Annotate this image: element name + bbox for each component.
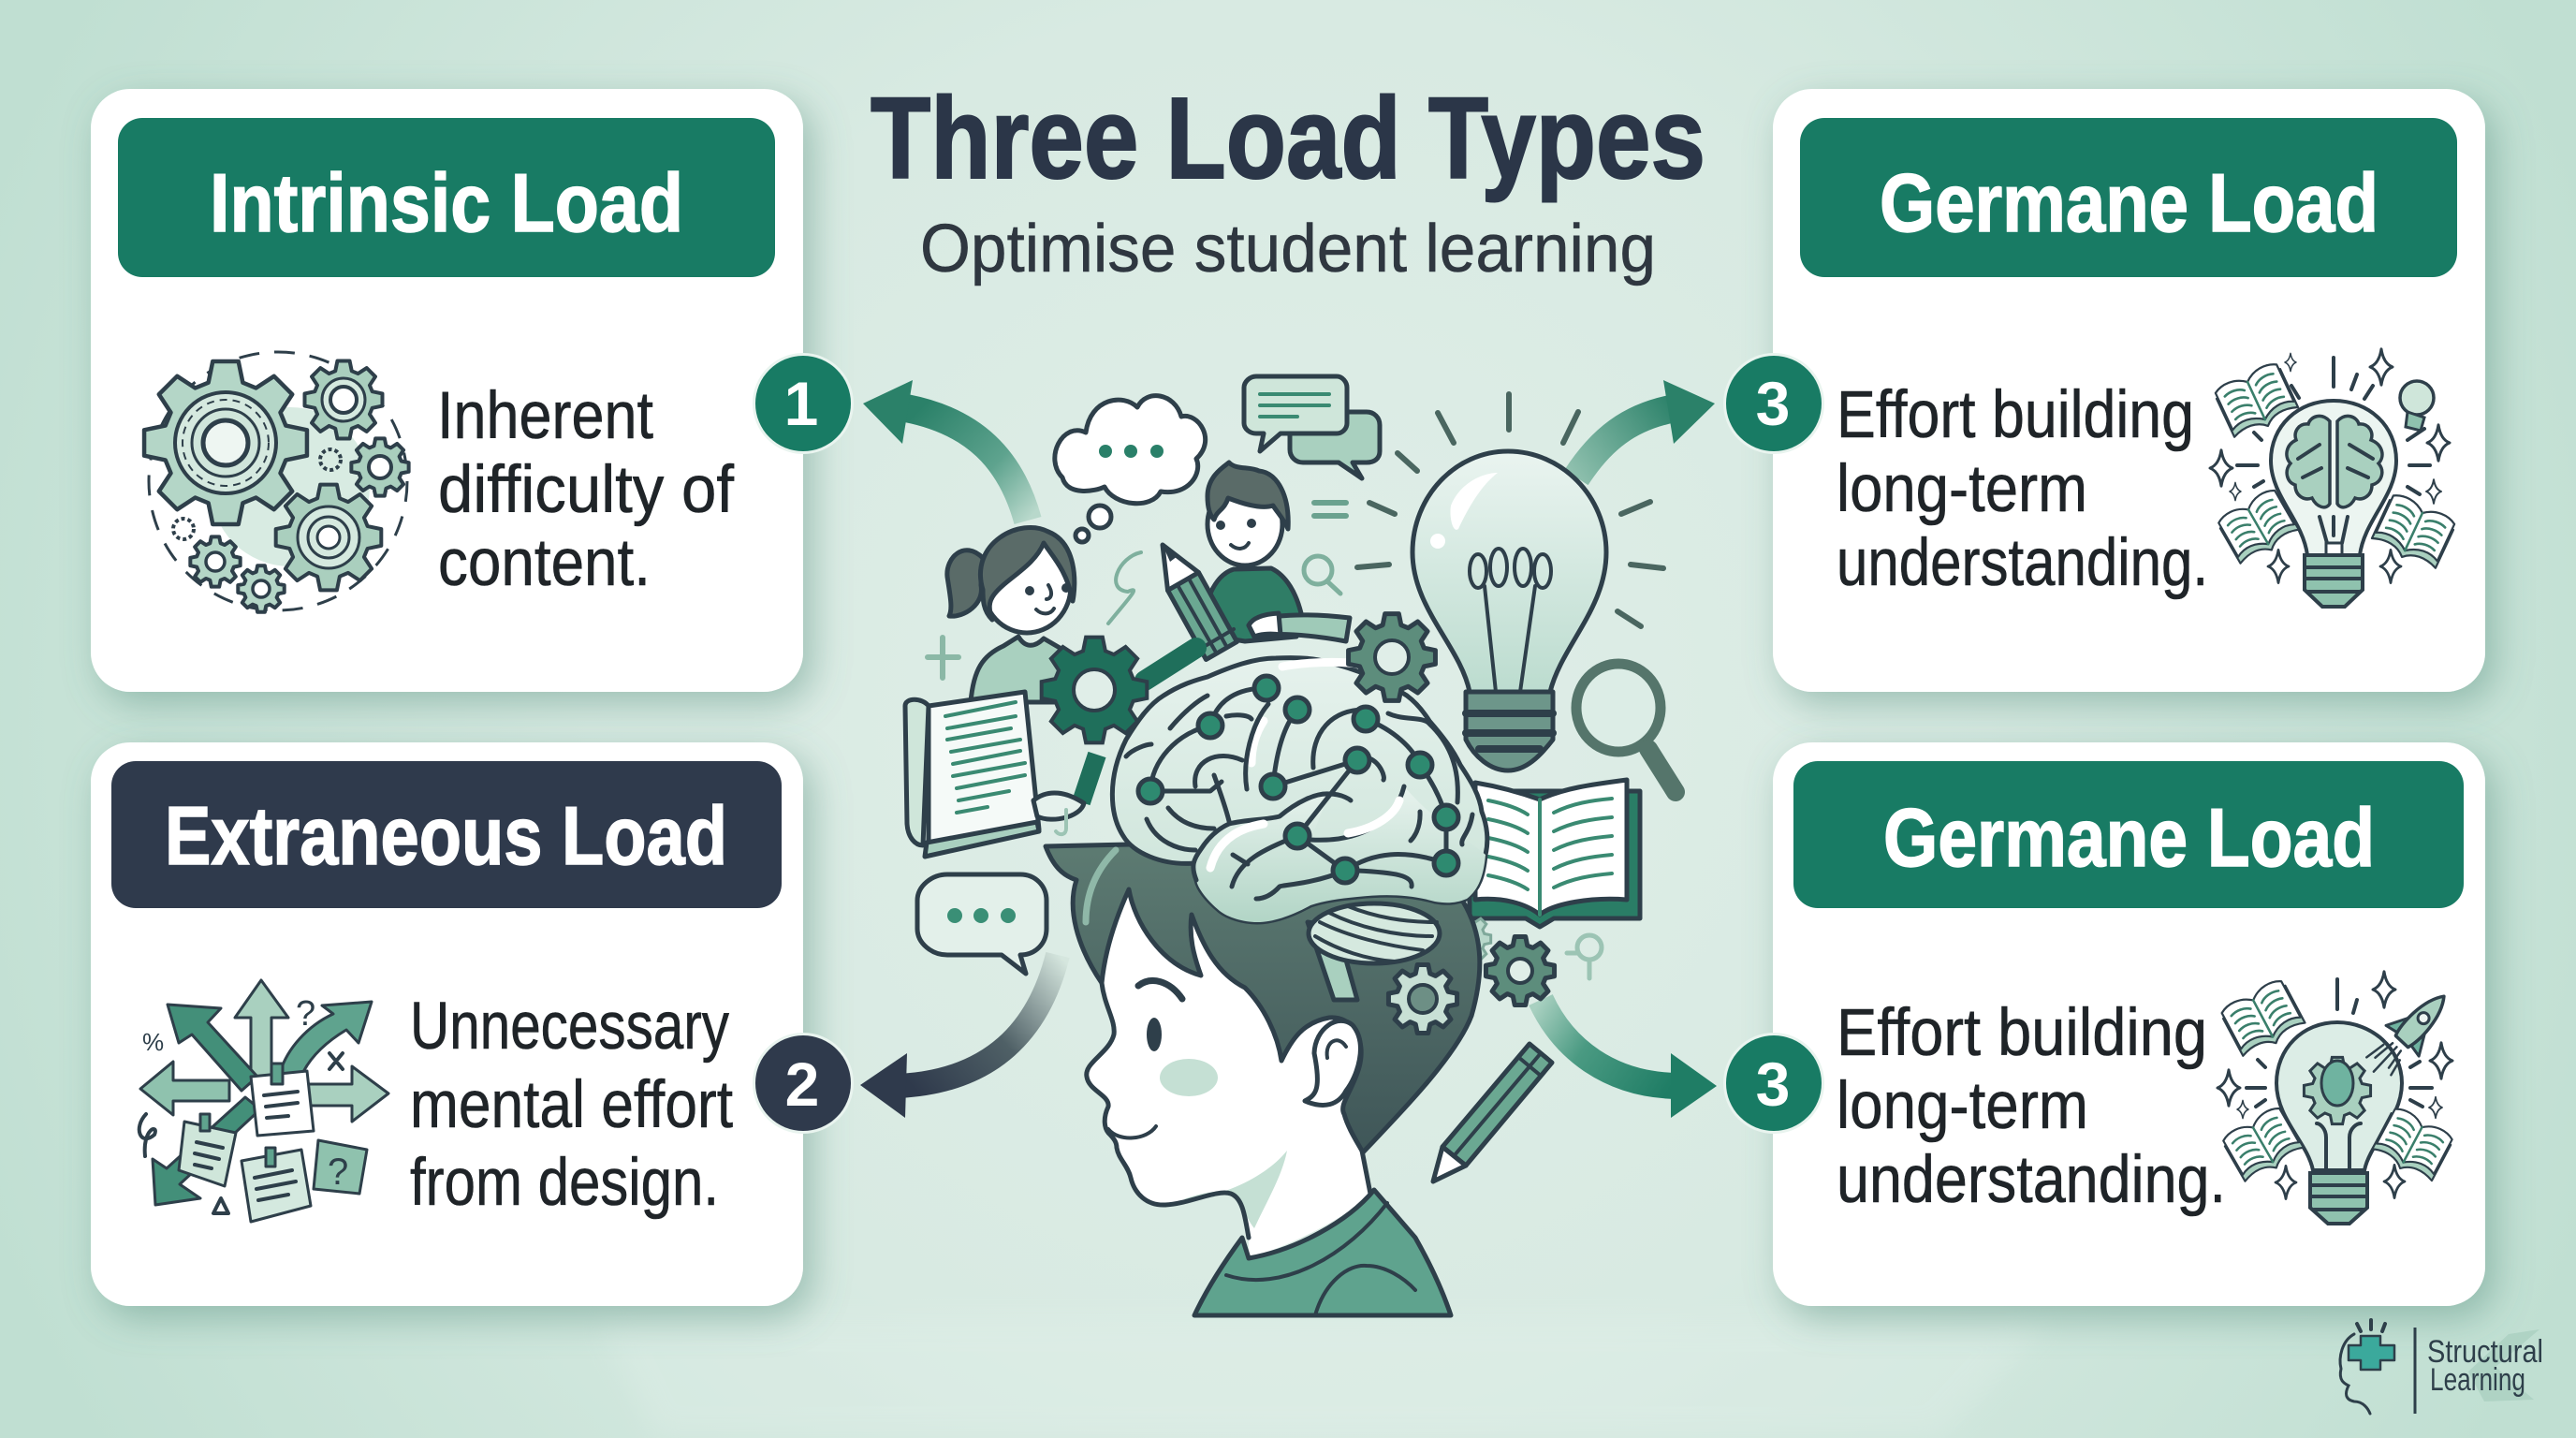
logo: structural learning: Structural [2427,1334,2543,1370]
brain [1112,658,1487,922]
heading: germane load bottom: Germane Load [1883,791,2375,884]
badge 1 [753,353,854,454]
icon: gears [144,352,409,612]
text: extraneous description: mental effort [410,1068,733,1142]
left speech bubble [917,874,1046,974]
text: intrinsic description: content. [438,526,651,600]
badge 2 [753,1033,854,1134]
gear above brain [1349,614,1435,700]
pencil [1433,1044,1552,1181]
arrow to extraneous [860,955,1058,1118]
text: intrinsic description [437,379,734,600]
heading: germane load bottom [1793,761,2464,908]
small gears at head [1441,914,1602,1005]
text: germane description bottom: understanding. [1837,1143,2226,1217]
text: extraneous description: Unnecessary [410,990,729,1064]
heading: germane load top [1800,118,2457,277]
icon: scattered arrows and notes [139,980,388,1222]
icon: lightbulb with brain and books [2210,349,2457,607]
arrow to intrinsic [863,380,1028,521]
badge 3 top: 3 [1756,369,1790,438]
decorative symbols [928,503,1346,678]
heading: intrinsic load [118,118,775,277]
heading: germane load top: Germane Load [1880,156,2378,249]
badge 3 bottom: 3 [1756,1049,1790,1119]
boy face and neck [1087,889,1370,1258]
head gear [1388,964,1457,1034]
text: germane description top: Effort building [1837,378,2194,452]
boy hair [1046,843,1480,1152]
large lightbulb [1357,394,1663,770]
panel: germane load bottom [1773,742,2485,1306]
panel: germane load top [1773,89,2485,692]
boy student [1163,462,1350,659]
neural network [1138,676,1458,887]
icon: scattered arrows and notes: ? [296,994,315,1034]
arrow to germane bottom [1541,1000,1717,1118]
icon: scattered arrows and notes: % [142,1028,164,1056]
icon: scattered arrows and notes: ? [328,1152,348,1193]
text: germane description bottom: long-term [1837,1069,2088,1143]
panel: intrinsic load [91,89,803,692]
boy shirt [1194,1190,1451,1315]
magnifying glass [1576,664,1676,792]
text: germane description top [1837,378,2208,600]
central illustration: student with brain and ideas [905,376,1676,1315]
text: intrinsic description: difficulty of [438,453,734,527]
heading: intrinsic load: Intrinsic Load [210,156,683,249]
left book [905,692,1039,857]
icon: lightbulb with gear and rocket [2217,972,2460,1224]
title: Three Load Types [871,75,1705,203]
badge 3 bottom [1723,1033,1824,1134]
subtitle: Optimise student learning [920,212,1656,286]
text: extraneous description: from design. [410,1146,719,1220]
brain folds [1126,696,1472,899]
badge 2: 2 [785,1049,819,1119]
badge 1: 1 [784,369,818,438]
heading: extraneous load: Extraneous Load [165,789,727,882]
cerebellum and brain stem [1308,903,1440,1000]
logo: structural learning [2340,1320,2543,1414]
text: intrinsic description: Inherent [437,379,653,453]
boy ear [1305,1020,1360,1105]
text: germane description bottom [1837,996,2226,1217]
arrow to germane top [1576,380,1715,477]
text: extraneous description [410,990,733,1220]
text: germane description top: understanding. [1837,526,2208,600]
logo: structural learning: Learning [2430,1362,2525,1398]
thought cloud [1055,396,1206,542]
open book [1470,780,1640,927]
dark gear [1033,638,1196,834]
badge 3 top [1723,353,1824,454]
text: germane description bottom: Effort building [1837,996,2207,1070]
heading: extraneous load [111,761,782,908]
panel: extraneous load [91,742,803,1306]
speech bubbles [1244,376,1380,478]
text: germane description top: long-term [1837,452,2087,526]
girl student [947,527,1076,702]
